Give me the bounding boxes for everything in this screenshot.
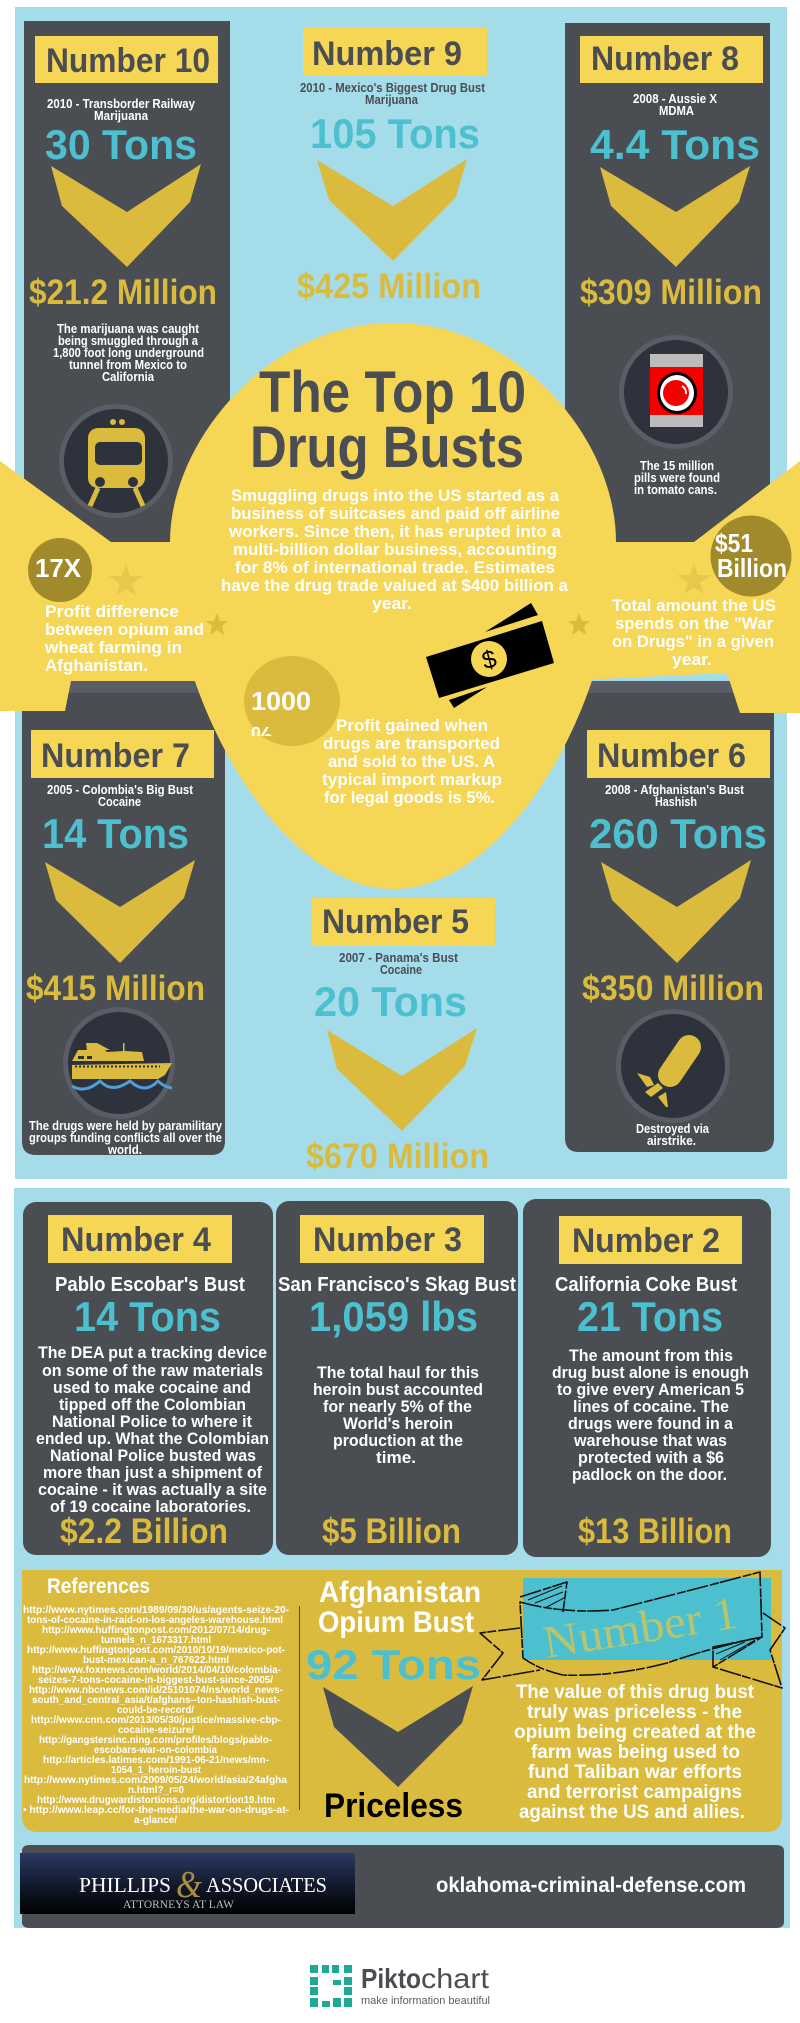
card: number 2	[523, 1199, 771, 1557]
bust: number 6: airstrike.	[647, 1133, 696, 1148]
bust: number 5: $670 Million	[306, 1137, 489, 1176]
intro text: Smuggling drugs into the US started as a	[231, 486, 560, 505]
icon: money: $	[479, 645, 500, 675]
icon: tomato can	[622, 338, 730, 446]
card: number 4: of 19 cocaine laboratories.	[50, 1498, 251, 1516]
bust: number 7: groups funding conflicts all over the	[29, 1130, 222, 1145]
references list: tunnels_n_1673317.html	[101, 1634, 211, 1646]
references list: seizes-7-tons-cocaine-in-biggest-bust-since-2005/	[38, 1674, 273, 1686]
intro text: for 8% of international trade. Estimates	[235, 558, 555, 577]
references list: cocaine-seizure/	[118, 1724, 194, 1736]
law firm logo	[20, 1853, 355, 1914]
website url: oklahoma-criminal-defense.com	[436, 1874, 746, 1897]
card: number 4: cocaine - it was actually a site	[38, 1481, 267, 1499]
intro text: business of suitcases and paid off airline	[231, 504, 560, 523]
number 1 center stats: Priceless	[324, 1787, 463, 1825]
stat: 17X	[28, 538, 228, 675]
panel: number 7 dark column	[22, 681, 225, 1155]
card: number 4: Pablo Escobar's Bust	[55, 1274, 245, 1296]
bust: number 8: 4.4 Tons	[590, 121, 760, 168]
stat: 1000%: %	[251, 721, 273, 751]
card: number 2: padlock on the door.	[572, 1466, 727, 1484]
card: number 4: on some of the raw materials	[42, 1362, 263, 1380]
references list: 1054_1_heroin-bust	[111, 1764, 201, 1776]
law firm logo: PHILLIPS	[79, 1873, 171, 1897]
stat: 1000%	[244, 656, 502, 807]
number 1 ribbon banner: Number 1	[540, 1587, 741, 1668]
number 1 description: farm was being used to	[531, 1741, 740, 1763]
icon: ship	[66, 1010, 172, 1116]
intro text: workers. Since then, it has erupted into a	[228, 522, 562, 541]
title: The Top 10	[259, 360, 526, 425]
bust: number 10: 30 Tons	[45, 121, 197, 168]
bust: number 6: Destroyed via	[636, 1121, 710, 1136]
stat: 17X: Afghanistan.	[45, 656, 148, 675]
bust: number 5: Cocaine	[380, 962, 422, 977]
bust: number 7	[26, 730, 223, 1157]
icon: rocket	[618, 1012, 728, 1120]
card: number 4: The DEA put a tracking device	[38, 1344, 267, 1362]
stat: 17X: Profit difference	[45, 602, 179, 621]
card: number 2: protected with a $6	[578, 1449, 724, 1467]
stat: $51 Billion: spends on the "War	[615, 614, 773, 633]
bust: number 9: $425 Million	[297, 267, 481, 306]
bust: number 10: 2010 - Transborder Railway	[47, 96, 196, 111]
references list: http://articles.latimes.com/1991-06-21/news/mn-	[43, 1754, 269, 1766]
card: number 2: lines of cocaine. The	[573, 1398, 729, 1416]
law firm logo: &	[176, 1864, 202, 1906]
number 1 description: fund Taliban war efforts	[528, 1761, 742, 1783]
footer bar	[22, 1845, 784, 1928]
card: number 3: 1,059 lbs	[309, 1293, 478, 1340]
bust: number 6: $350 Million	[582, 969, 764, 1008]
bust: number 10: 1,800 foot long underground	[53, 345, 204, 360]
bust: number 10	[29, 36, 218, 384]
central yellow egg and side wings	[0, 323, 800, 889]
card: number 4: used to make cocaine and	[53, 1379, 251, 1397]
card: number 4: tipped off the Colombian	[59, 1396, 246, 1414]
number 1 description: The value of this drug bust	[516, 1681, 754, 1703]
panel: bottom blue background	[14, 1188, 790, 1928]
intro text: have the drug trade valued at $400 billion a	[221, 576, 569, 595]
piktochart logo: Pikto	[361, 1963, 421, 1994]
number 1 center stats: 92 Tons	[306, 1641, 481, 1688]
card: number 2: $13 Billion	[578, 1512, 732, 1551]
panel: number 1 gold background	[22, 1570, 782, 1832]
bust: number 6: 260 Tons	[589, 810, 767, 857]
number 1 ribbon banner	[480, 1572, 785, 1688]
number 1 center stats: Afghanistan	[319, 1576, 481, 1609]
bust: number 9: Number 9	[312, 35, 462, 73]
title: Drug Busts	[250, 415, 524, 480]
card: number 3: The total haul for this	[317, 1364, 479, 1382]
intro text: multi-billion dollar business, accounting	[233, 540, 557, 559]
card: number 4: $2.2 Billion	[60, 1512, 228, 1551]
references list: could-be-record/	[117, 1704, 194, 1716]
references list: http://www.cnn.com/2013/05/30/justice/massive-cbp-	[31, 1714, 281, 1726]
number 1 description: truly was priceless - the	[527, 1701, 742, 1723]
bust: number 9: Marijuana	[365, 92, 419, 107]
panel: number 6 dark column	[565, 681, 774, 1152]
references list	[23, 1575, 289, 1826]
bust: number 5: 2007 - Panama's Bust	[339, 950, 459, 965]
bust: number 6	[582, 730, 770, 1148]
card: number 2: to give every American 5	[557, 1381, 744, 1399]
stat: 1000%: for legal goods is 5%.	[324, 788, 495, 807]
number 1 center stats	[306, 1576, 481, 1825]
card: number 3: San Francisco's Skag Bust	[278, 1274, 516, 1296]
intro text: year.	[372, 594, 412, 613]
piktochart logo: chart	[421, 1963, 489, 1994]
intro text	[221, 486, 569, 613]
stat: $51 Billion: $51	[715, 528, 753, 558]
references list: a-glance/	[134, 1814, 177, 1826]
card: number 2: California Coke Bust	[555, 1274, 737, 1296]
card: number 3: Number 3	[313, 1221, 462, 1259]
card: number 2: The amount from this	[569, 1347, 733, 1365]
bust: number 9: 2010 - Mexico's Biggest Drug Bust	[300, 80, 486, 95]
stat: $51 Billion: on Drugs" in a given	[612, 632, 774, 651]
bust: number 9	[297, 28, 487, 306]
bust: number 8: $309 Million	[580, 273, 762, 312]
references list: http://www.nytimes.com/1989/09/30/us/agents-seize-20-	[23, 1604, 289, 1616]
bust: number 7: 2005 - Colombia's Big Bust	[47, 782, 194, 797]
card: number 3: World's heroin	[343, 1415, 453, 1433]
card: number 2: 21 Tons	[577, 1293, 723, 1340]
references list: http://www.huffingtonpost.com/2012/07/14/drug-	[42, 1624, 270, 1636]
bust: number 7: The drugs were held by paramilitary	[29, 1118, 223, 1133]
icon: money	[426, 603, 554, 708]
references list: References	[47, 1575, 150, 1598]
number 1 description: opium being created at the	[514, 1721, 756, 1743]
references list: tons-of-cocaine-in-raid-on-los-angeles-warehouse.html	[27, 1614, 283, 1626]
bust: number 10: Number 10	[46, 42, 210, 80]
bust: number 8: The 15 million	[640, 458, 714, 473]
bust: number 8: Number 8	[591, 40, 739, 78]
references list: • http://www.leap.cc/for-the-media/the-war-on-drugs-at-	[23, 1804, 289, 1816]
stat: $51 Billion: year.	[672, 650, 712, 669]
card: number 4: more than just a shipment of	[43, 1464, 262, 1482]
bust: number 10: Marijuana	[94, 108, 149, 123]
card: number 3: heroin bust accounted	[313, 1381, 483, 1399]
piktochart logo: make information beautiful	[361, 1995, 490, 2007]
bust: number 5: Number 5	[322, 903, 469, 941]
stat: 1000%: drugs are transported	[323, 734, 500, 753]
references list: bust-mexican-a_n_767622.html	[83, 1654, 229, 1666]
card: number 3: for nearly 5% of the	[323, 1398, 472, 1416]
references list: escobars-war-on-colombia	[94, 1744, 217, 1756]
bust: number 10: $21.2 Million	[29, 273, 217, 312]
bust: number 10: being smuggled through a	[58, 333, 199, 348]
bust: number 7: Cocaine	[98, 794, 141, 809]
stat: 1000%: typical import markup	[322, 770, 502, 789]
bust: number 7: Number 7	[41, 737, 190, 775]
card: number 4: 14 Tons	[74, 1293, 221, 1340]
bust: number 6: Hashish	[655, 794, 697, 809]
number 1 description: against the US and allies.	[519, 1801, 745, 1823]
bust: number 8	[580, 36, 763, 497]
bust: number 8: MDMA	[659, 103, 695, 118]
bust: number 7: world.	[107, 1142, 142, 1157]
bust: number 7: $415 Million	[26, 969, 205, 1008]
card: number 2: warehouse that was	[573, 1432, 727, 1450]
number 1 center stats: Opium Bust	[318, 1606, 474, 1639]
law firm logo: ATTORNEYS AT LAW	[123, 1897, 235, 1911]
stat: 17X: 17X	[35, 553, 82, 583]
bust: number 5: 20 Tons	[314, 978, 467, 1025]
card: number 3: $5 Billion	[322, 1512, 461, 1551]
references list: http://www.nytimes.com/2009/05/24/world/asia/24afgha	[24, 1774, 287, 1786]
card: number 2: drugs were found in a	[568, 1415, 734, 1433]
panel: number 8 dark column	[565, 23, 770, 542]
stat: $51 Billion: Billion	[717, 553, 787, 583]
icon: train	[62, 406, 170, 516]
bust: number 10: tunnel from Mexico to	[69, 357, 187, 372]
card: number 3	[276, 1201, 518, 1555]
card: number 4	[23, 1202, 273, 1555]
number 1 description: and terrorist campaigns	[527, 1781, 742, 1803]
stat: 1000%: 1000	[251, 686, 311, 716]
panel: top blue background	[15, 7, 787, 1179]
bust: number 10: California	[102, 369, 155, 384]
bust: number 9: 105 Tons	[310, 110, 480, 157]
card: number 4: Number 4	[61, 1221, 211, 1259]
card: number 4: National Police to where it	[52, 1413, 252, 1431]
panel: number 10 dark column	[24, 21, 230, 542]
stat: 17X: wheat farming in	[44, 638, 182, 657]
card: number 3: time.	[376, 1449, 416, 1467]
bust: number 5	[306, 898, 495, 1176]
title	[250, 360, 526, 480]
law firm logo: ASSOCIATES	[206, 1873, 327, 1897]
bust: number 6: 2008 - Afghanistan's Bust	[605, 782, 745, 797]
piktochart logo	[310, 1963, 490, 2007]
references list: south_and_central_asia/t/afghans--ton-hashish-bust-	[32, 1694, 280, 1706]
stat: 1000%: Profit gained when	[336, 716, 488, 735]
bust: number 6: Number 6	[597, 737, 746, 775]
bust: number 7: 14 Tons	[42, 810, 189, 857]
bust: number 8: 2008 - Aussie X	[633, 91, 717, 106]
stat: 17X: between opium and	[45, 620, 204, 639]
references list: http://www.foxnews.com/world/2014/04/10/colombia-	[32, 1664, 281, 1676]
stat: $51 Billion	[568, 516, 792, 669]
references list: n.html?_r=0	[128, 1784, 184, 1796]
stat: 1000%: and sold to the US. A	[328, 752, 495, 771]
bust: number 8: pills were found	[634, 470, 720, 485]
references list: http://www.huffingtonpost.com/2010/10/19/mexico-pot-	[27, 1644, 285, 1656]
card: number 4: ended up. What the Colombian	[36, 1430, 269, 1448]
bust: number 10: The marijuana was caught	[57, 321, 200, 336]
card: number 4: National Police busted was	[50, 1447, 256, 1465]
bust: number 8: in tomato cans.	[634, 482, 717, 497]
card: number 2: drug bust alone is enough	[552, 1364, 749, 1382]
references list: http://gangstersinc.ning.com/profiles/blogs/pablo-	[39, 1734, 272, 1746]
references list: http://www.nbcnews.com/id/25101074/ns/world_news-	[29, 1684, 283, 1696]
card: number 3: production at the	[333, 1432, 463, 1450]
references list: http://www.drugwardistortions.org/distortion19.htm	[37, 1794, 275, 1806]
stat: $51 Billion: Total amount the US	[612, 596, 776, 615]
number 1 description	[514, 1681, 756, 1823]
card: number 2: Number 2	[572, 1222, 720, 1260]
